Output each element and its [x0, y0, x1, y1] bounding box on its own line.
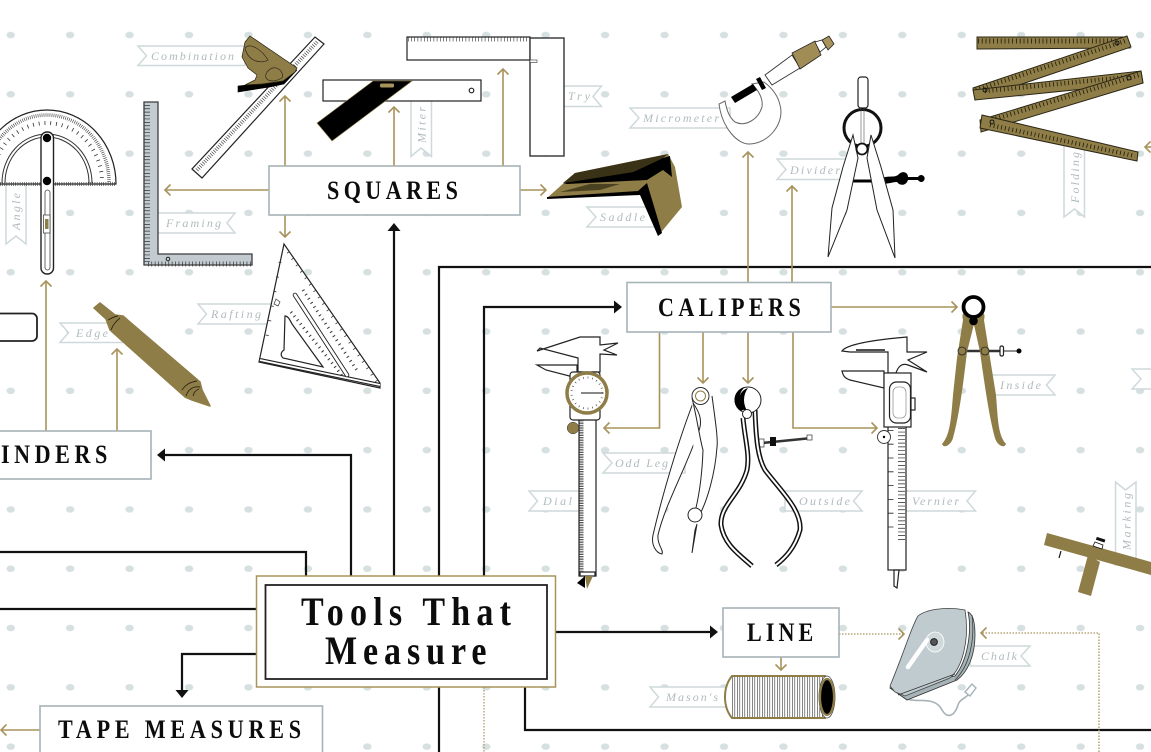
title text: Tools That	[301, 591, 512, 635]
label: Try: Try	[568, 89, 591, 103]
connector: main frame line	[439, 267, 1151, 752]
icon: try square	[407, 37, 564, 156]
icon: miter square	[317, 80, 481, 141]
label: Try	[560, 86, 602, 106]
label: Saddle: Saddle	[600, 210, 646, 224]
label: Rafting: Rafting	[210, 307, 261, 321]
box: tape measures: TAPE MEASURES	[58, 716, 301, 744]
icon: dial caliper	[537, 337, 618, 589]
box: finders	[0, 431, 151, 479]
label: Vernier: Vernier	[912, 494, 959, 508]
connector: far left lower	[0, 608, 256, 610]
connector: to finders	[165, 455, 351, 576]
label: Folding: Folding	[1068, 152, 1082, 204]
label: Inside: Inside	[999, 378, 1042, 392]
icon: edge finder	[94, 303, 210, 406]
label: Framing	[155, 213, 235, 233]
arrows from calipers	[604, 152, 957, 428]
label: Edge	[60, 323, 125, 342]
connector: dotted bottom	[483, 687, 485, 752]
box: line: LINE	[747, 619, 813, 647]
box: tape measures	[40, 706, 322, 752]
icon: rounded finder block	[0, 314, 37, 341]
label: Micrometer	[630, 108, 730, 128]
arrows from finders	[46, 281, 117, 431]
box: squares	[269, 166, 520, 215]
label: Combination	[138, 46, 245, 66]
label: Outside: Outside	[799, 494, 851, 508]
label: Divider: Divider	[789, 163, 840, 177]
connector: to line	[556, 631, 710, 633]
label: Vernier	[900, 491, 976, 511]
arrow: right edge	[1145, 146, 1151, 148]
label: Angle	[6, 180, 26, 244]
icon: divider	[828, 77, 925, 258]
label: Angle: Angle	[9, 192, 23, 231]
icon: rafting square	[259, 244, 380, 388]
label: Divider	[777, 159, 848, 180]
connector: bottom right	[525, 687, 1151, 730]
box: finders: INDERS	[1, 441, 107, 469]
label: Mason's	[650, 687, 735, 707]
label: Odd Leg: Odd Leg	[615, 456, 668, 470]
connector: to calipers	[484, 307, 614, 576]
icon: saddle square	[547, 154, 682, 236]
label: Rafting	[198, 304, 275, 324]
label: Outside	[785, 491, 862, 511]
label: Mason's: Mason's	[665, 690, 718, 704]
title text	[301, 591, 512, 674]
box: squares: SQUARES	[327, 177, 458, 205]
label: Marking	[1116, 482, 1136, 565]
label: Folding	[1064, 140, 1084, 217]
label: Combination: Combination	[151, 49, 234, 63]
label: far right partial	[1132, 369, 1151, 389]
label: Miter	[411, 100, 432, 156]
label: Dial: Dial	[542, 494, 573, 508]
arrows from squares	[165, 69, 546, 237]
connector: far left upper	[0, 552, 306, 576]
icon: vernier caliper	[842, 337, 927, 588]
icon: micrometer	[719, 36, 834, 144]
icon: outside caliper	[721, 387, 812, 566]
icon: chalk line	[890, 608, 976, 715]
label: Odd Leg	[603, 453, 685, 473]
box: calipers: CALIPERS	[658, 294, 801, 322]
label: Edge: Edge	[75, 326, 109, 340]
label: Saddle	[587, 207, 660, 227]
icon: inside caliper	[942, 297, 1022, 446]
label: Dial	[529, 491, 585, 511]
icon: framing square	[144, 102, 252, 265]
label: Miter: Miter	[414, 107, 428, 144]
label: Micrometer: Micrometer	[642, 111, 719, 125]
icon: folding rule	[973, 36, 1143, 161]
label: Chalk	[970, 646, 1030, 666]
icon: combination square	[192, 36, 324, 178]
icon: mason's line spool	[725, 676, 835, 718]
label: Marking: Marking	[1120, 493, 1134, 551]
label: Framing: Framing	[165, 216, 221, 230]
icon: marking gauge	[1044, 533, 1151, 596]
icon: protractor angle finder	[0, 110, 116, 274]
connector: to tape measures	[182, 654, 256, 690]
icon: odd leg caliper	[653, 388, 717, 554]
label: Chalk: Chalk	[981, 649, 1018, 663]
connector: to squares	[393, 231, 395, 576]
box: line	[723, 608, 839, 657]
title box	[256, 576, 556, 687]
arrows from line	[781, 633, 1099, 752]
title text: Measure	[325, 630, 486, 674]
arrow: tape measures left	[1, 729, 40, 731]
box: calipers	[627, 282, 831, 332]
label: Inside	[990, 375, 1055, 395]
